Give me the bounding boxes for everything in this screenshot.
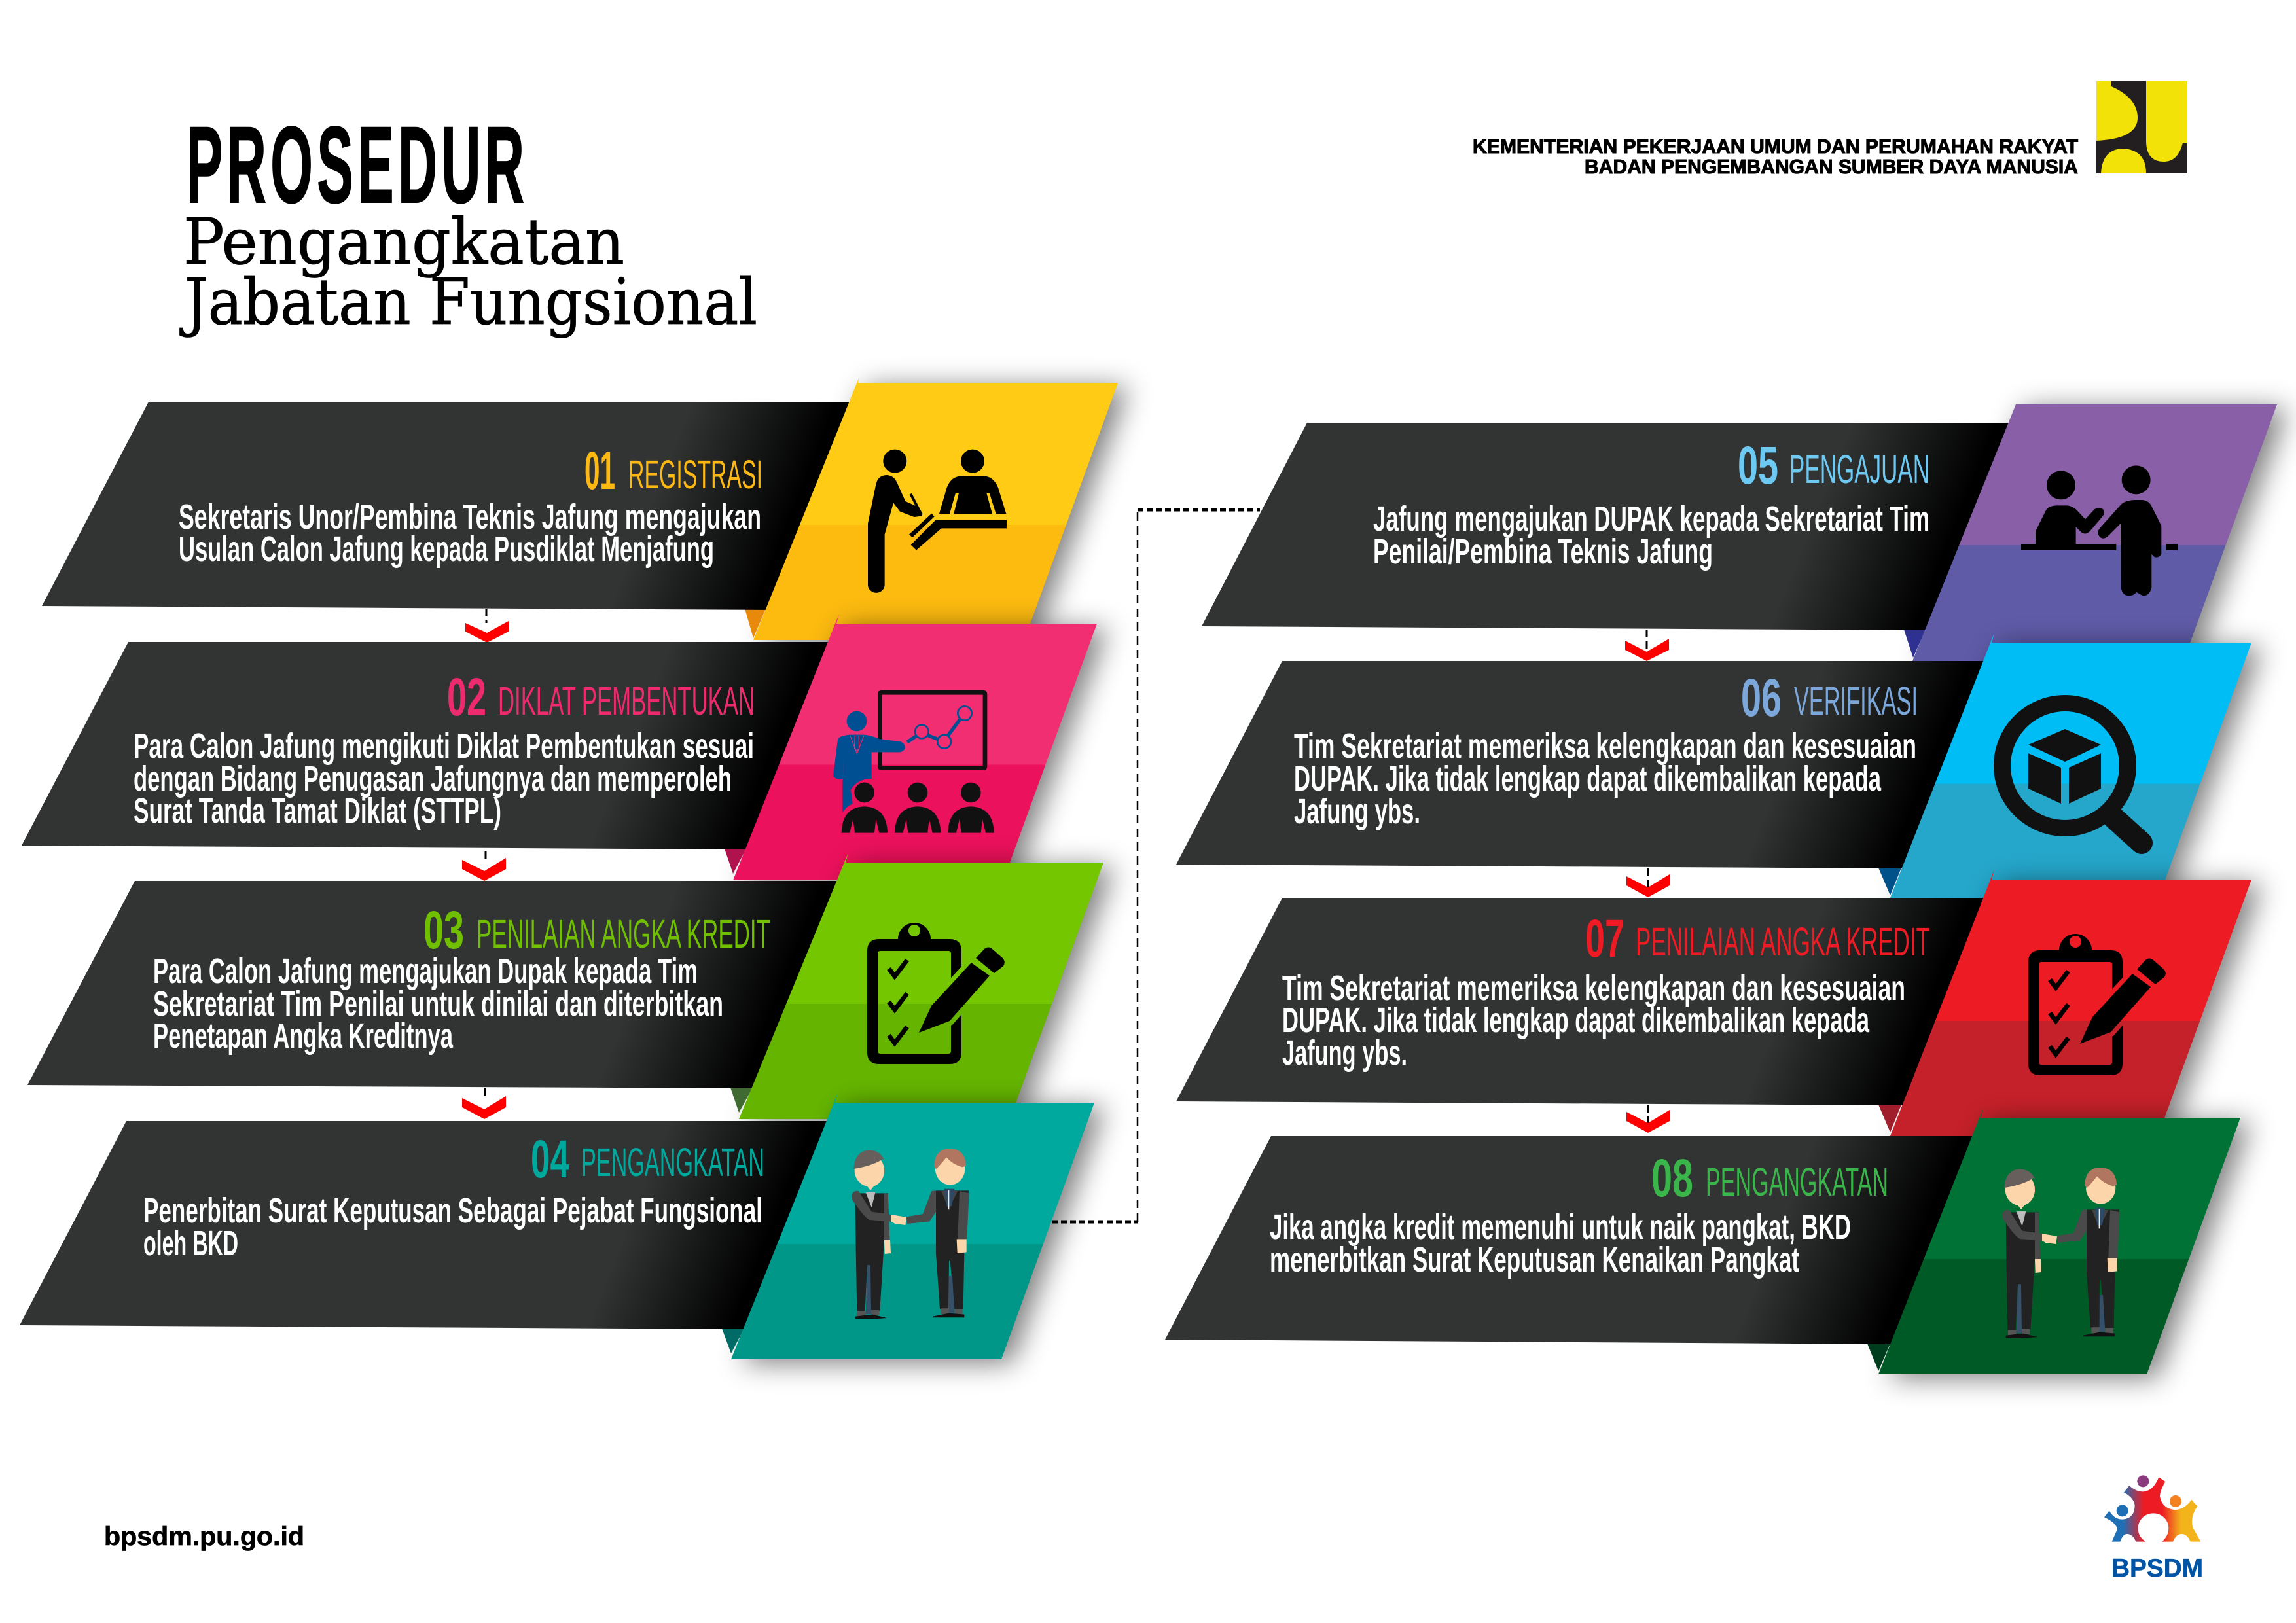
panel: step 01 registrasi	[42, 378, 1128, 644]
icon: registration desk	[868, 450, 1007, 593]
heading 05: 05	[1738, 436, 1778, 495]
icon: magnifier and box	[1994, 695, 2142, 843]
icon: clipboard and pencil	[867, 923, 1005, 1064]
text 02: Para Calon Jafung mengikuti Diklat Pembentukan sesuai	[134, 726, 754, 766]
heading 07	[1585, 909, 1930, 969]
heading 05	[1738, 436, 1929, 495]
text 06	[1294, 726, 1916, 831]
text 04	[143, 1191, 762, 1263]
icon: BPSDM logo	[2104, 1475, 2200, 1542]
text 08: menerbitkan Surat Keputusan Kenaikan Pangkat	[1270, 1240, 1799, 1279]
heading 04: 04	[531, 1130, 569, 1189]
text 08: Jika angka kredit memenuhi untuk naik pangkat, BKD	[1270, 1207, 1851, 1247]
panel: step 08 pengangkatan	[1165, 1108, 2251, 1378]
title: PROSEDUR	[187, 103, 528, 225]
title	[179, 103, 757, 339]
text 04: Penerbitan Surat Keputusan Sebagai Pejabat Fungsional	[143, 1191, 762, 1230]
heading 03	[423, 901, 770, 960]
heading 06: 06	[1741, 668, 1782, 728]
text 05: Penilai/Pembina Teknis Jafung	[1373, 532, 1713, 571]
heading 06: VERIFIKASI	[1794, 679, 1918, 723]
text 07: DUPAK. Jika tidak lengkap dapat dikembalikan kepada	[1282, 1001, 1870, 1040]
ministry name: KEMENTERIAN PEKERJAAN UMUM DAN PERUMAHAN RAKYAT	[1473, 135, 2078, 158]
text 03: Sekretariat Tim Penilai untuk dinilai dan diterbitkan	[153, 984, 723, 1024]
heading 03: PENILAIAN ANGKA KREDIT	[476, 912, 770, 956]
ministry name: BADAN PENGEMBANGAN SUMBER DAYA MANUSIA	[1585, 155, 2078, 178]
text 06: DUPAK. Jika tidak lengkap dapat dikembalikan kepada	[1294, 759, 1882, 798]
heading 01: 01	[584, 441, 615, 501]
heading 02: 02	[447, 668, 486, 727]
panel: step 07 penilaian angka kredit	[1176, 870, 2262, 1140]
text 03: Penetapan Angka Kreditnya	[153, 1016, 454, 1056]
title: Jabatan Fungsional	[179, 265, 757, 339]
text 04: oleh BKD	[143, 1224, 238, 1263]
title: Pengangkatan	[183, 205, 624, 279]
heading 01	[584, 441, 762, 501]
panel: step 05 pengajuan	[1202, 395, 2287, 665]
panel: step 03 penilaian angka kredit	[27, 853, 1114, 1123]
heading 08: PENGANGKATAN	[1706, 1160, 1888, 1204]
connector arrows: right column	[1625, 630, 1670, 1133]
heading 02	[447, 668, 755, 727]
text 01: Usulan Calon Jafung kepada Pusdiklat Menjafung	[179, 529, 714, 569]
heading 02: DIKLAT PEMBENTUKAN	[498, 679, 755, 723]
heading 01: REGISTRASI	[628, 452, 762, 497]
connector arrows: left column	[462, 609, 509, 1119]
text 01: Sekretaris Unor/Pembina Teknis Jafung mengajukan	[179, 497, 761, 537]
text 07: Jafung ybs.	[1282, 1033, 1407, 1073]
text 07: Tim Sekretariat memeriksa kelengkapan dan kesesuaian	[1282, 969, 1905, 1008]
text 03	[153, 952, 723, 1056]
icon: two officials shaking hands	[852, 1149, 969, 1319]
heading 06	[1741, 668, 1918, 728]
heading 08: 08	[1651, 1149, 1693, 1208]
connector: dashed line from step 04 to step 05	[1052, 510, 1260, 1222]
icon: two officials shaking hands	[2002, 1168, 2120, 1338]
text 06: Tim Sekretariat memeriksa kelengkapan dan kesesuaian	[1294, 726, 1916, 766]
heading 07: 07	[1585, 909, 1624, 969]
text 06: Jafung ybs.	[1294, 792, 1420, 831]
website address: bpsdm.pu.go.id	[104, 1522, 304, 1551]
heading 05: PENGAJUAN	[1789, 447, 1929, 491]
icon: ministry logo	[2096, 81, 2187, 173]
BPSDM wordmark: BPSDM	[2111, 1554, 2203, 1582]
heading 08	[1651, 1149, 1888, 1208]
text 03: Para Calon Jafung mengajukan Dupak kepada Tim	[153, 952, 698, 991]
heading 07: PENILAIAN ANGKA KREDIT	[1636, 919, 1930, 964]
icon: submission at desk	[2021, 465, 2178, 596]
heading 04	[531, 1130, 764, 1189]
ministry name	[1473, 135, 2078, 178]
icon: presenter and audience	[833, 692, 994, 833]
heading 04: PENGANGKATAN	[581, 1140, 764, 1185]
icon: clipboard and pencil	[2028, 934, 2166, 1075]
panel: step 02 diklat pembentukan	[22, 614, 1107, 884]
panel: step 06 verifikasi	[1176, 633, 2262, 902]
heading 03: 03	[423, 901, 464, 960]
panel: step 04 pengangkatan	[20, 1093, 1105, 1363]
text 02: Surat Tanda Tamat Diklat (STTPL)	[134, 791, 501, 830]
text 01	[179, 497, 761, 569]
text 05: Jafung mengajukan DUPAK kepada Sekretariat Tim	[1373, 499, 1929, 539]
text 02	[134, 726, 754, 830]
text 07	[1282, 969, 1905, 1073]
text 08	[1270, 1207, 1851, 1279]
text 02: dengan Bidang Penugasan Jafungnya dan memperoleh	[134, 759, 732, 798]
text 05	[1373, 499, 1929, 571]
